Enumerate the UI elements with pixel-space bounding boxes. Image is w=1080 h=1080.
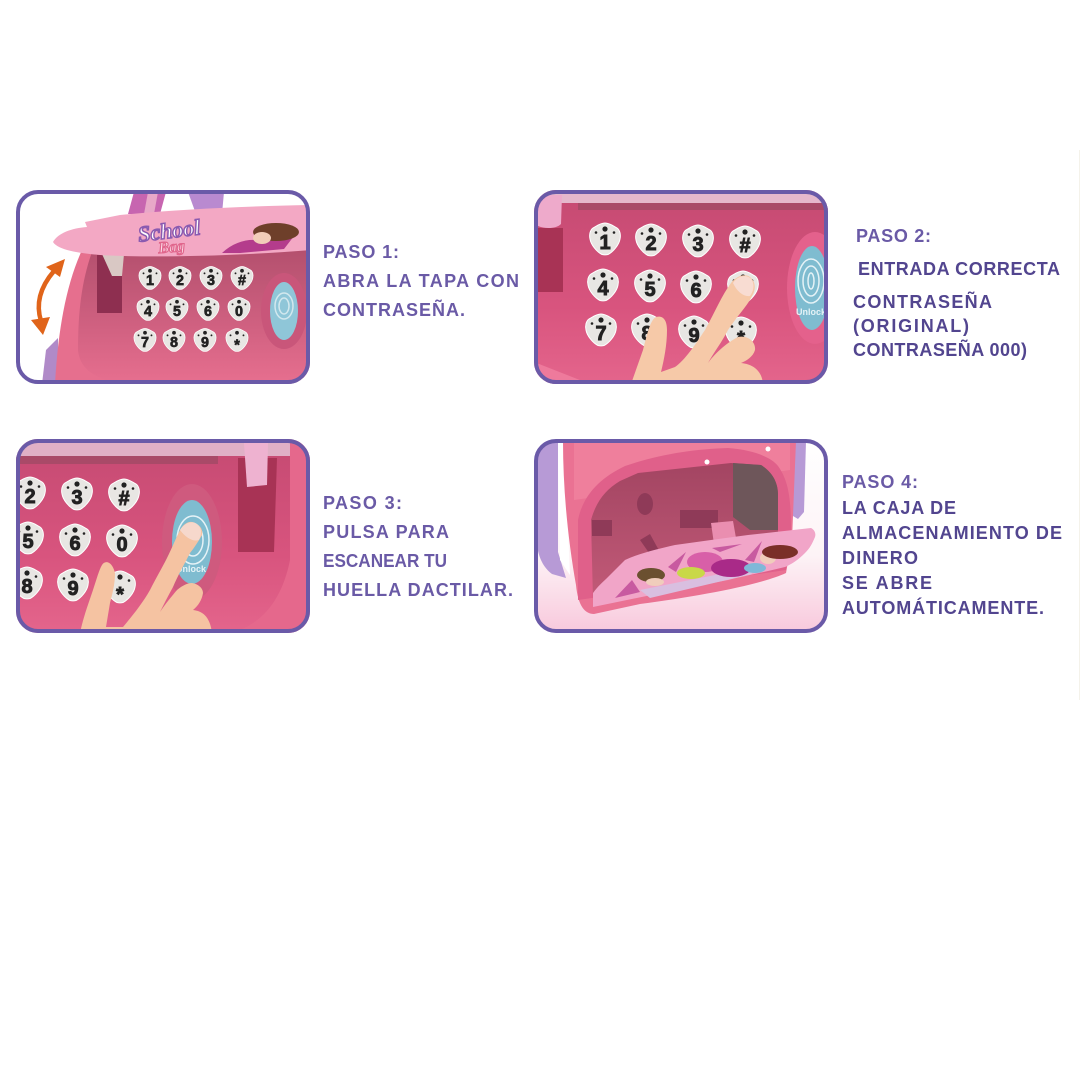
keypad: 3 <box>692 234 704 256</box>
keypad: 0 <box>235 304 243 320</box>
lid strip <box>534 192 828 203</box>
latch slot <box>238 458 277 552</box>
bag straps <box>128 192 224 214</box>
keypad: 2 <box>645 233 657 255</box>
keypad: 6 <box>690 280 702 302</box>
text: step 1: CONTRASEÑA. <box>323 299 465 320</box>
door latch tab <box>711 521 736 540</box>
keypad: 7 <box>141 335 149 351</box>
keypad: 2 <box>24 486 36 508</box>
lower body edge <box>534 364 580 384</box>
orange double arrow <box>31 259 65 335</box>
keypad: 3 <box>71 487 83 509</box>
open door <box>593 528 815 607</box>
text: step 2: ENTRADA CORRECTA <box>858 259 1060 279</box>
keypad: 7 <box>595 323 607 345</box>
text: step 2: CONTRASEÑA 000) <box>853 339 1027 360</box>
keypad: 4 <box>597 278 609 300</box>
blue fingerprint pad <box>787 232 824 340</box>
keypad: 1 <box>599 232 611 254</box>
keypad: # <box>739 235 751 257</box>
text: step 3: PULSA PARA <box>323 522 449 542</box>
blue fingerprint pad: Unlock <box>796 307 827 317</box>
purple side strap <box>42 338 58 380</box>
lid logo: Bag <box>157 238 186 257</box>
keypad <box>134 266 253 353</box>
top face <box>574 441 790 500</box>
keypad: 0 <box>116 534 128 556</box>
text: step 3: PASO 3: <box>323 493 402 513</box>
inner front panel <box>78 250 312 384</box>
keypad: 9 <box>688 325 700 347</box>
interior right wall <box>733 463 778 530</box>
latch dots <box>704 446 770 464</box>
interior <box>591 463 778 600</box>
keypad: 9 <box>67 578 79 600</box>
keypad: 4 <box>144 304 152 320</box>
keypad: 8 <box>21 576 33 598</box>
bag body <box>55 245 312 384</box>
text: step 4: LA CAJA DE <box>842 498 956 518</box>
interior details <box>592 493 718 552</box>
panel: step 3 photo <box>12 439 312 633</box>
keypad: 3 <box>207 273 215 289</box>
blue fingerprint pad <box>162 484 222 600</box>
purple left strap <box>534 441 566 578</box>
hinge <box>537 195 562 228</box>
keypad: 9 <box>201 335 209 351</box>
blue fingerprint pad <box>261 273 307 349</box>
text: step 2: (ORIGINAL) <box>853 316 969 336</box>
text: step 3: ESCANEAR TU <box>323 551 447 571</box>
lid logo: School <box>137 214 202 247</box>
text: step 2: PASO 2: <box>856 226 931 246</box>
text: step 3 <box>323 493 513 600</box>
text: step 1 <box>323 242 519 320</box>
text: step 4 <box>842 472 1062 618</box>
latch slot <box>97 255 122 313</box>
door opening rim <box>578 448 791 600</box>
hand <box>631 275 763 384</box>
text: step 4: PASO 4: <box>842 472 918 492</box>
lid logo <box>138 218 200 256</box>
right edge line <box>1079 150 1080 700</box>
keypad: * <box>234 337 240 353</box>
keypad: 8 <box>641 323 653 345</box>
hand <box>80 522 212 633</box>
text: step 2 <box>853 226 1060 360</box>
text: step 4: DINERO <box>842 548 918 568</box>
keypad: 5 <box>173 304 181 320</box>
hinge <box>102 254 124 276</box>
keypad: 8 <box>170 335 178 351</box>
lid strip <box>16 441 290 456</box>
text: step 4: SE ABRE <box>842 573 932 593</box>
lid girl sticker <box>222 223 299 253</box>
purple right strap <box>793 441 806 519</box>
right body edge <box>269 441 310 633</box>
text: step 3: HUELLA DACTILAR. <box>323 580 513 600</box>
text: step 4: AUTOMÁTICAMENTE. <box>842 597 1044 618</box>
bag body <box>563 441 796 614</box>
panel: step 1 photo <box>16 190 312 384</box>
keypad: 6 <box>69 533 81 555</box>
text: step 1: ABRA LA TAPA CON <box>323 271 519 291</box>
keypad <box>586 223 760 350</box>
panel: step 2 photo <box>534 190 843 384</box>
keypad: # <box>118 488 130 510</box>
latch slot <box>538 228 563 292</box>
keypad: 1 <box>146 273 154 289</box>
keypad: * <box>116 584 124 606</box>
text: step 1: PASO 1: <box>323 242 399 262</box>
keypad: # <box>238 273 246 289</box>
hinge <box>244 443 268 487</box>
text: step 2: CONTRASEÑA <box>853 291 992 312</box>
keypad: 2 <box>176 273 184 289</box>
keypad: 6 <box>204 304 212 320</box>
blue fingerprint pad: Unlock <box>176 564 207 574</box>
lid <box>53 205 312 256</box>
panel: step 4 photo <box>534 439 828 633</box>
text: step 4: ALMACENAMIENTO DE <box>842 523 1062 543</box>
door girls sticker <box>615 541 798 598</box>
keypad <box>12 477 139 606</box>
keypad: * <box>737 328 745 350</box>
keypad: 5 <box>644 279 656 301</box>
keypad: 5 <box>22 531 34 553</box>
